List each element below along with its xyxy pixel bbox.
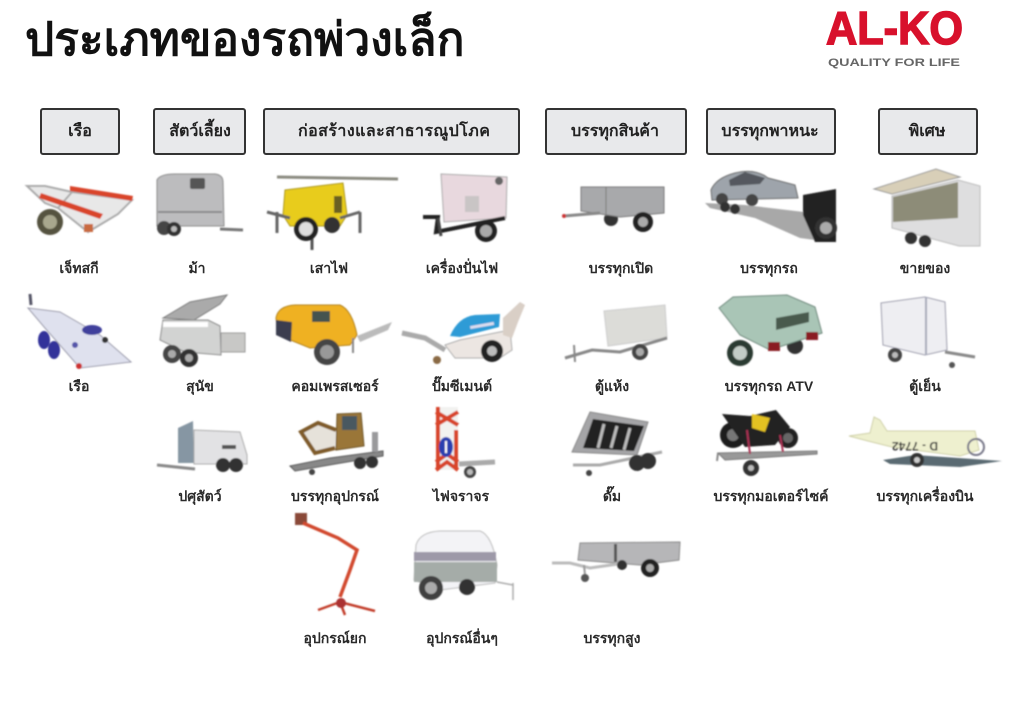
icon: dog trailer — [160, 295, 245, 367]
label: บรรทุกเครื่องบิน: บรรทุกเครื่องบิน — [876, 486, 974, 505]
icon: traffic light trailer — [436, 407, 495, 478]
label: เสาไฟ: เสาไฟ — [310, 259, 348, 276]
header: พิเศษ: พิเศษ — [909, 122, 946, 140]
label: ปศุสัตว์: ปศุสัตว์ — [178, 488, 222, 505]
label: ตู้เย็น: ตู้เย็น — [909, 377, 941, 395]
icon: vending trailer — [874, 169, 980, 247]
label: ดั๊ม: ดั๊ม — [603, 485, 621, 504]
label: คอมเพรสเซอร์: คอมเพรสเซอร์ — [291, 378, 379, 394]
header: เรือ: เรือ — [68, 122, 92, 140]
title: ประเภทของรถพ่วงเล็ก — [25, 11, 464, 65]
label: ม้า: ม้า — [188, 260, 206, 276]
label: บรรทุกรถ: บรรทุกรถ — [740, 260, 798, 277]
label: บรรทุกอุปกรณ์: บรรทุกอุปกรณ์ — [291, 488, 379, 505]
header: บรรทุกสินค้า — [546, 109, 686, 154]
icon: refrigerated trailer — [881, 297, 975, 368]
label: เจ็ทสกี: เจ็ทสกี — [59, 259, 99, 276]
label: สุนัข: สุนัข — [186, 378, 214, 395]
icon: livestock trailer — [157, 421, 247, 472]
header: บรรทุกพาหนะ: บรรทุกพาหนะ — [721, 123, 819, 141]
logo: AL-KO: QUALITY FOR LIFE — [828, 57, 960, 69]
label: เครื่องปั่นไฟ: เครื่องปั่นไฟ — [426, 258, 498, 276]
icon: horse trailer — [157, 174, 243, 236]
label: บรรทุกเปิด: บรรทุกเปิด — [589, 260, 653, 277]
icon: car transporter — [705, 171, 837, 242]
header: ก่อสร้างและสาธารณูปโภค: ก่อสร้างและสาธารณูปโภค — [298, 120, 490, 142]
label: อุปกรณ์อื่นๆ: อุปกรณ์อื่นๆ — [426, 628, 498, 647]
icon: ATV trailer — [719, 295, 822, 366]
header: ก่อสร้างและสาธารณูปโภค — [264, 109, 519, 154]
icon: other equipment trailer — [414, 531, 513, 600]
header: สัตว์เลี้ยง: สัตว์เลี้ยง — [169, 118, 231, 140]
label: ขายของ: ขายของ — [900, 260, 950, 276]
label: บรรทุกมอเตอร์ไซค์: บรรทุกมอเตอร์ไซค์ — [714, 487, 828, 505]
label: เรือ: เรือ — [69, 378, 89, 394]
icon: jet ski trailer — [27, 186, 133, 235]
header: พิเศษ — [879, 109, 977, 154]
icon: tipper trailer — [572, 412, 662, 476]
icon: aircraft trailer: D - 7742 — [892, 439, 938, 453]
icon: cement pump — [402, 302, 525, 364]
label: บรรทุกสูง: บรรทุกสูง — [583, 630, 641, 647]
label: อุปกรณ์ยก: อุปกรณ์ยก — [304, 630, 366, 647]
label: ตู้แห้ง: ตู้แห้ง — [595, 378, 629, 395]
icon: boat trailer — [28, 294, 131, 369]
label: ไฟจราจร: ไฟจราจร — [431, 487, 490, 504]
icon: motorcycle trailer — [717, 410, 817, 476]
icon: open trailer — [562, 187, 664, 232]
icon: light tower — [267, 177, 398, 250]
header: บรรทุกพาหนะ — [707, 109, 835, 154]
icon: plant trailer with excavator — [290, 413, 383, 475]
label: ปั๊มซีเมนต์: ปั๊มซีเมนต์ — [432, 375, 492, 394]
logo: AL-KO: AL-KO — [826, 2, 963, 54]
icon: boom lift — [295, 513, 375, 615]
header: บรรทุกสินค้า: บรรทุกสินค้า — [571, 122, 659, 141]
icon: aircraft trailer — [849, 417, 1002, 467]
icon: generator trailer — [423, 174, 507, 242]
label: บรรทุกรถ ATV: บรรทุกรถ ATV — [725, 378, 814, 395]
header: เรือ — [41, 109, 119, 154]
icon: dry van trailer — [565, 305, 667, 362]
icon: high-side trailer — [552, 542, 680, 582]
icon: compressor — [276, 305, 392, 365]
header: สัตว์เลี้ยง — [154, 109, 245, 154]
